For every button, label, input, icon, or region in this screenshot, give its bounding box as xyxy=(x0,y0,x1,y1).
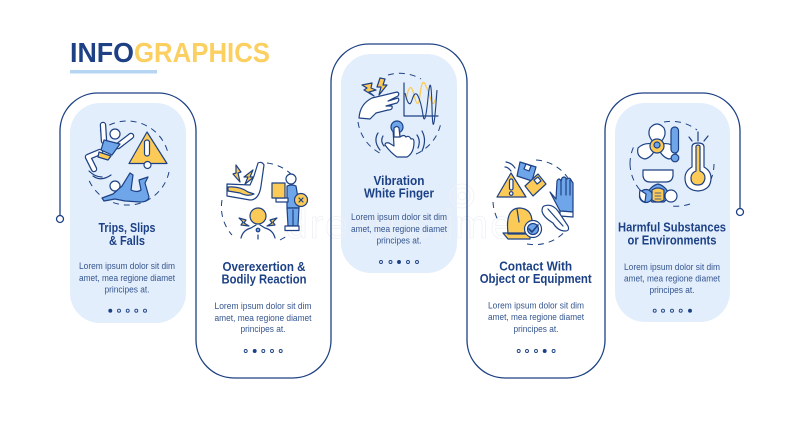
heading: bodily reaction: Bodily Reaction xyxy=(222,272,306,286)
body text: contact: Lorem ipsum dolor sit dim xyxy=(488,301,584,311)
body text: vibration: principes at. xyxy=(376,236,422,246)
connecting outline xyxy=(60,44,740,378)
body text: trips: amet, mea regione diamet xyxy=(79,273,175,283)
body text: trips: Lorem ipsum dolor sit dim xyxy=(79,261,175,271)
watermark: dreamstime xyxy=(286,203,514,247)
heading: harmful substances: Harmful Substances xyxy=(618,221,726,235)
body text: contact: principes at. xyxy=(514,324,558,334)
panel fill: vibration xyxy=(341,54,457,273)
body text: trips xyxy=(79,261,175,294)
heading: trips: Trips, Slips xyxy=(98,221,156,235)
heading: contact with: Contact With xyxy=(499,260,572,274)
body text: harmful: principes at. xyxy=(650,285,694,295)
body text: trips: principes at. xyxy=(104,284,150,294)
body text: vibration xyxy=(351,212,447,246)
icon: overexertion xyxy=(221,162,308,240)
body text: vibration: Lorem ipsum dolor sit dim xyxy=(351,212,447,222)
title: GRAPHICS xyxy=(134,37,270,68)
right end dot xyxy=(736,208,744,216)
heading: object or equipment: Object or Equipment xyxy=(480,272,592,286)
body text: harmful xyxy=(624,262,720,295)
heading: or environments: or Environments xyxy=(628,233,717,247)
title: INFO xyxy=(70,37,134,68)
body text: harmful: amet, mea regione diamet xyxy=(624,274,720,284)
pagination dots: overexertion xyxy=(244,350,282,352)
title underline xyxy=(70,70,157,74)
title xyxy=(70,37,270,68)
heading: white finger: White Finger xyxy=(364,187,434,201)
icon: harmful substances xyxy=(630,121,714,206)
left end dot xyxy=(56,216,64,222)
icon: vibration white finger xyxy=(358,73,441,157)
pagination dots: harmful xyxy=(653,309,692,312)
watermark xyxy=(286,184,514,247)
icon: trips slips falls xyxy=(88,121,169,205)
pagination dots: trips xyxy=(109,309,146,312)
panel fill: harmful substances xyxy=(615,103,730,322)
body text: overexertion: principes at. xyxy=(240,324,286,334)
heading: overexertion: Overexertion & xyxy=(222,260,306,274)
body text: overexertion: amet, mea regione diamet xyxy=(214,313,312,323)
panel fill: trips xyxy=(70,103,186,323)
body text: harmful: Lorem ipsum dolor sit dim xyxy=(624,262,720,272)
heading: falls: & Falls xyxy=(109,234,145,248)
body text: overexertion: Lorem ipsum dolor sit dim xyxy=(214,301,312,311)
heading: vibration: Vibration xyxy=(374,174,424,188)
pagination dots: contact xyxy=(517,350,555,352)
pagination dots: vibration xyxy=(380,260,418,264)
icon: contact with object xyxy=(493,160,573,245)
body text: contact xyxy=(488,301,584,334)
body text: contact: amet, mea regione diamet xyxy=(488,312,584,322)
body text: overexertion xyxy=(214,301,312,334)
body text: vibration: amet, mea regione diamet xyxy=(351,224,447,234)
